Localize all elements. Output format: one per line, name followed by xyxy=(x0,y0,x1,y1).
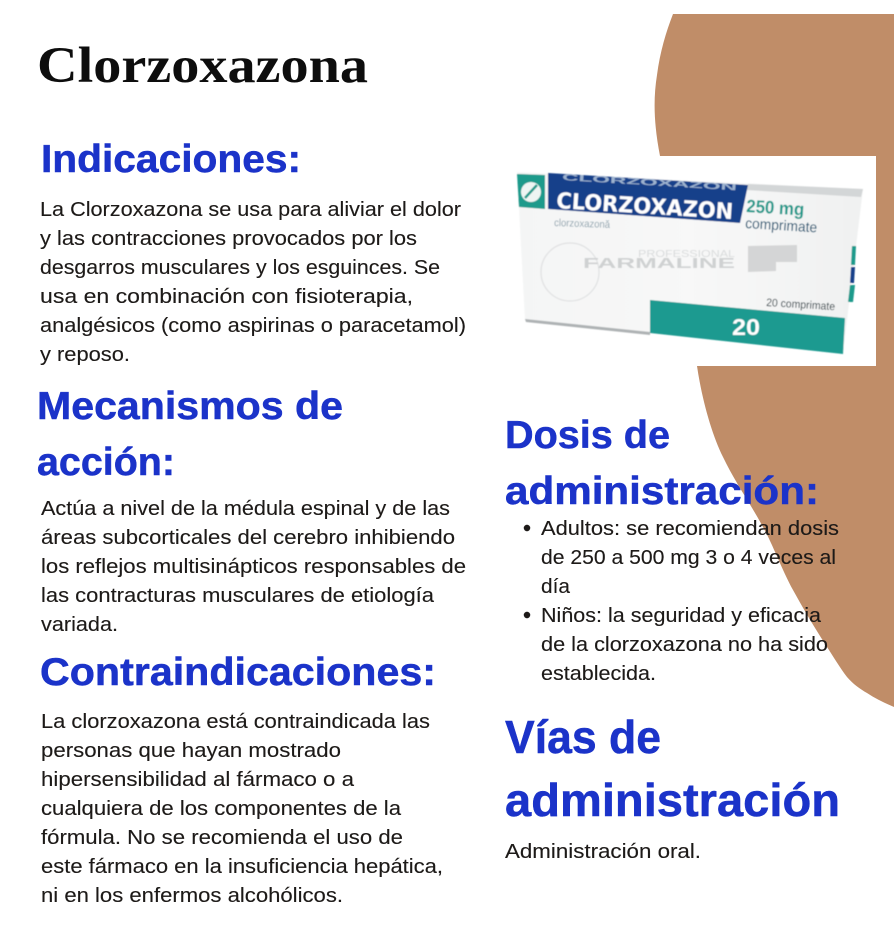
text: dosis list: día xyxy=(541,576,571,598)
blue brand band: CLORZOXAZON xyxy=(556,189,734,225)
heading: mecanismos de accion: acción: xyxy=(37,441,175,484)
text: contraindicaciones body: cualquiera de los componentes de la xyxy=(41,798,402,820)
teal count band: 20 xyxy=(732,314,760,340)
text: indicaciones body: y reposo. xyxy=(40,344,130,366)
watermark: FARMALINE xyxy=(583,256,736,272)
heading: mecanismos de accion xyxy=(37,385,343,484)
heading: vias: administración xyxy=(505,774,840,826)
generic name: clorzoxazonă xyxy=(554,217,610,231)
text: indicaciones body: La Clorzoxazona se usa para aliviar el dolor xyxy=(40,199,461,221)
section: contraindicaciones xyxy=(40,651,443,907)
text: mecanismos body: variada. xyxy=(41,614,118,636)
text: mecanismos body: los reflejos multisinápticos responsables de xyxy=(41,556,466,578)
teal logo square xyxy=(517,174,545,209)
text: indicaciones body: y las contracciones provocados por los xyxy=(40,228,417,250)
text: indicaciones body: usa en combinación con fisioterapia, xyxy=(40,286,413,308)
blue brand band xyxy=(548,172,748,225)
text: contraindicaciones body: La clorzoxazona está contraindicada las xyxy=(41,711,430,733)
product photo: medicine box xyxy=(500,156,876,366)
form label: comprimate xyxy=(745,216,818,236)
section: dosis de administracion xyxy=(505,414,839,685)
heading: vias: Vías de xyxy=(505,711,661,763)
text: dosis list: Adultos: se recomiendan dosis xyxy=(541,518,839,540)
text: dosis list xyxy=(524,518,839,685)
text: contraindicaciones body: fórmula. No se recomienda el uso de xyxy=(41,827,403,849)
heading: mecanismos de accion: Mecanismos de xyxy=(37,385,343,428)
text: indicaciones body: desgarros musculares y los esguinces. Se xyxy=(40,257,440,279)
text: dosis list: de la clorzoxazona no ha sido xyxy=(541,634,828,656)
heading: contraindicaciones: Contraindicaciones: xyxy=(40,651,436,694)
heading: indicaciones: Indicaciones: xyxy=(41,138,301,181)
decorative brown blob xyxy=(655,14,894,707)
text: mecanismos body: las contracturas musculares de etiología xyxy=(41,585,435,607)
text: contraindicaciones body: este fármaco en la insuficiencia hepática, xyxy=(41,856,443,878)
text: vias body: Administración oral. xyxy=(505,841,701,863)
text: contraindicaciones body: ni en los enfermos alcohólicos. xyxy=(41,885,343,907)
text: indicaciones body xyxy=(40,199,466,366)
box body xyxy=(517,172,863,353)
text: contraindicaciones body: hipersensibilidad al fármaco o a xyxy=(41,769,355,791)
text: mecanismos body xyxy=(41,498,466,636)
title: Clorzoxazona xyxy=(37,38,368,94)
text: indicaciones body: analgésicos (como aspirinas o paracetamol) xyxy=(40,315,466,337)
heading: dosis: administración: xyxy=(505,470,819,513)
count label: 20 comprimate xyxy=(766,297,835,313)
section: indicaciones xyxy=(40,138,466,366)
blue brand band: CLORZOXAZON xyxy=(562,172,737,192)
text: mecanismos body: Actúa a nivel de la médula espinal y de las xyxy=(41,498,450,520)
text: contraindicaciones body: personas que hayan mostrado xyxy=(41,740,341,762)
watermark xyxy=(541,243,797,301)
text: dosis list: Niños: la seguridad y eficacia xyxy=(541,605,822,627)
side stripes xyxy=(848,246,856,302)
text: contraindicaciones body xyxy=(41,711,443,907)
text: dosis list: de 250 a 500 mg 3 o 4 veces al xyxy=(541,547,836,569)
heading: dosis xyxy=(505,414,819,513)
watermark: PROFESSIONAL xyxy=(638,248,735,260)
text: mecanismos body: áreas subcorticales del cerebro inhibiendo xyxy=(41,527,455,549)
heading: vias xyxy=(505,711,840,826)
section: mecanismos de accion xyxy=(37,385,466,636)
teal count band xyxy=(650,300,845,354)
section: vias de administracion xyxy=(505,711,840,863)
text: dosis list: establecida. xyxy=(541,663,656,685)
heading: dosis: Dosis de xyxy=(505,414,670,457)
dosage label: 250 mg xyxy=(746,196,805,220)
